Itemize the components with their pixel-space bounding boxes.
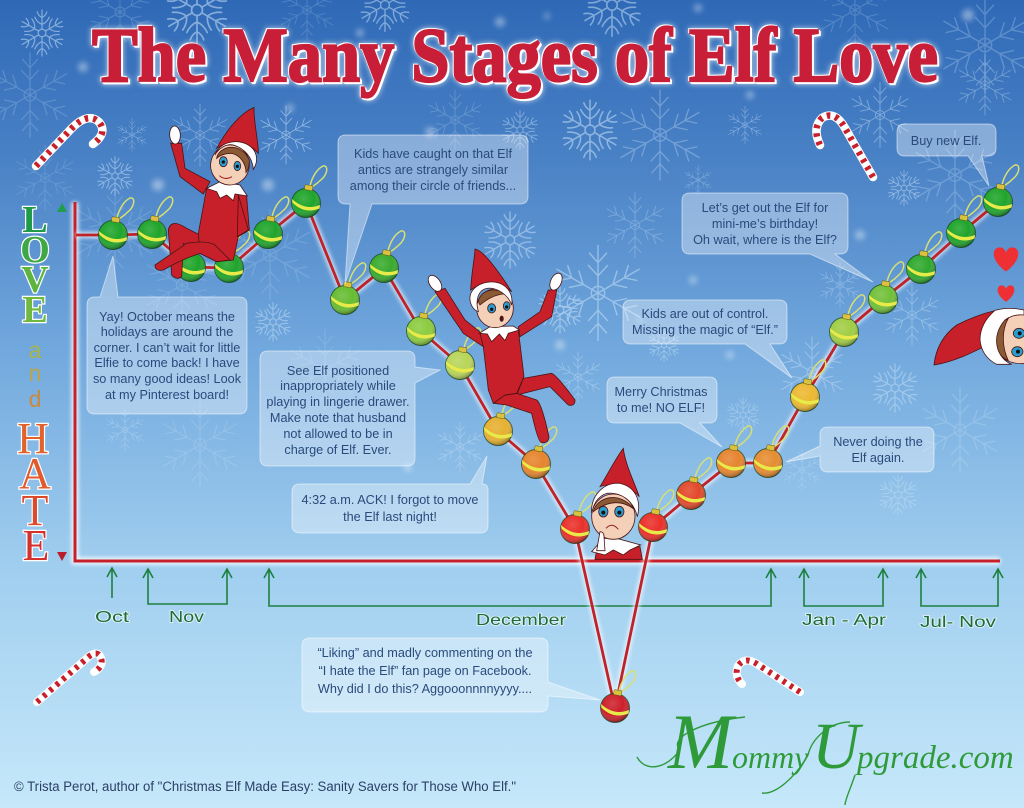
callout: out of control	[623, 300, 792, 378]
callout: kids caught on: among their circle of friends...	[350, 179, 516, 193]
website wordmark: ommy	[732, 739, 809, 775]
y axis label: LOVE and HATE: n	[29, 360, 41, 386]
hearts	[994, 247, 1018, 302]
y axis label: LOVE and HATE: E	[22, 289, 48, 331]
time bracket: Jul - Nov	[916, 569, 1003, 606]
love line chart	[76, 202, 998, 708]
callout: Facebook: “Liking” and madly commenting on the	[317, 646, 533, 660]
y axis label: LOVE and HATE	[17, 199, 51, 570]
callout: birthday: mini-me’s birthday!	[712, 217, 818, 231]
callout: never again: Elf again.	[852, 451, 904, 465]
y axis label: LOVE and HATE: A	[19, 449, 51, 498]
callout: never again	[786, 427, 934, 472]
snowflake background pattern	[0, 0, 1024, 515]
callout: birthday	[682, 193, 873, 282]
y axis label: LOVE and HATE: V	[21, 259, 49, 301]
y axis label: LOVE and HATE: a	[29, 337, 42, 363]
callout: 4:32 a.m.: the Elf last night!	[343, 510, 437, 524]
elf: sad at the bottom	[592, 448, 642, 559]
callout: October: Yay! October means the	[99, 310, 235, 324]
time arrow: Oct	[107, 568, 117, 598]
callout: buy new elf	[897, 124, 996, 186]
callout: Merry Christmas	[607, 377, 722, 447]
callout: October	[87, 256, 247, 414]
love-hate double arrow	[57, 203, 67, 561]
callout: October: holidays are around the	[101, 325, 233, 339]
callout: out of control: Missing the magic of “Elf.”	[632, 323, 778, 337]
month labels: December	[476, 612, 567, 629]
callout: October: corner. I can’t wait for little	[94, 341, 240, 355]
elf: sitting and waving	[155, 107, 258, 278]
callout: lingerie drawer	[260, 351, 440, 466]
y axis label: LOVE and HATE: L	[22, 199, 48, 241]
callout: birthday: Let’s get out the Elf for	[702, 201, 829, 215]
callout: kids caught on	[338, 135, 528, 284]
website wordmark: U	[812, 710, 864, 783]
ornaments: data points	[98, 165, 1019, 722]
callout: Merry Christmas: to me! NO ELF!	[617, 401, 705, 415]
callout: lingerie drawer: inappropriately while	[280, 379, 396, 393]
candy cane: top left	[36, 118, 102, 166]
candy cane: bottom left	[37, 653, 102, 702]
time bracket: Nov	[143, 569, 232, 604]
month labels: Nov	[169, 609, 204, 626]
callout: lingerie drawer: charge of Elf. Ever.	[284, 443, 392, 457]
y axis label: LOVE and HATE: T	[22, 486, 49, 535]
callout: lingerie drawer: Make note that husband	[270, 411, 406, 425]
callout: Facebook: Why did I do this? Aggooonnnnyyyy....	[318, 682, 532, 696]
y axis label: LOVE and HATE: H	[17, 414, 49, 463]
callout: kids caught on: Kids have caught on that Elf	[354, 147, 512, 161]
callout: lingerie drawer: See Elf positioned	[287, 364, 389, 378]
callout: out of control: Kids are out of control.	[642, 307, 768, 321]
callout: kids caught on: antics are strangely similar	[358, 163, 509, 177]
callout: Merry Christmas: Merry Christmas	[614, 385, 708, 399]
elf: peeking in from the right edge	[934, 308, 1024, 365]
callout: Facebook	[302, 638, 600, 712]
website wordmark: M	[667, 698, 737, 785]
callout: lingerie drawer: playing in lingerie drawer.	[266, 395, 410, 409]
callout: 4:32 a.m.: 4:32 a.m. ACK! I forgot to move	[301, 493, 479, 507]
bokeh snow dots	[78, 4, 974, 472]
website wordmark: pgrade.com	[855, 740, 1014, 776]
y axis label: LOVE and HATE: O	[20, 229, 50, 271]
website wordmark	[637, 698, 1014, 805]
callout: lingerie drawer: not allowed to be in	[283, 427, 393, 441]
candy cane: bottom middle	[737, 660, 800, 692]
y axis label: LOVE and HATE: d	[29, 386, 41, 412]
copyright footer: © Trista Perot, author of "Christmas Elf Made Easy: Sanity Savers for Those Who Elf."	[14, 779, 516, 794]
time bracket: December	[264, 569, 776, 606]
callout: never again: Never doing the	[833, 435, 923, 449]
callout: October: Elfie to come back! I have	[94, 356, 240, 370]
callout: October: so many good ideas! Look	[93, 372, 242, 386]
callout: 4:32 a.m.	[292, 456, 488, 533]
candy cane: top right	[816, 116, 873, 177]
month labels: Oct	[95, 609, 130, 626]
callout: buy new elf: Buy new Elf.	[911, 134, 981, 148]
title: The Many Stages of Elf Love	[92, 12, 938, 98]
month labels: Jul- Nov	[920, 614, 996, 631]
callout: October: at my Pinterest board!	[105, 388, 229, 402]
month labels: Jan - Apr	[802, 612, 887, 629]
axes	[75, 202, 1000, 561]
month labels	[95, 609, 996, 631]
callout: Facebook: “I hate the Elf” fan page on Facebook.	[318, 664, 532, 678]
y axis label: LOVE and HATE: E	[23, 521, 49, 570]
elf: falling	[425, 249, 575, 443]
callout: birthday: Oh wait, where is the Elf?	[693, 233, 837, 247]
time bracket: Jan - Apr	[799, 569, 888, 606]
